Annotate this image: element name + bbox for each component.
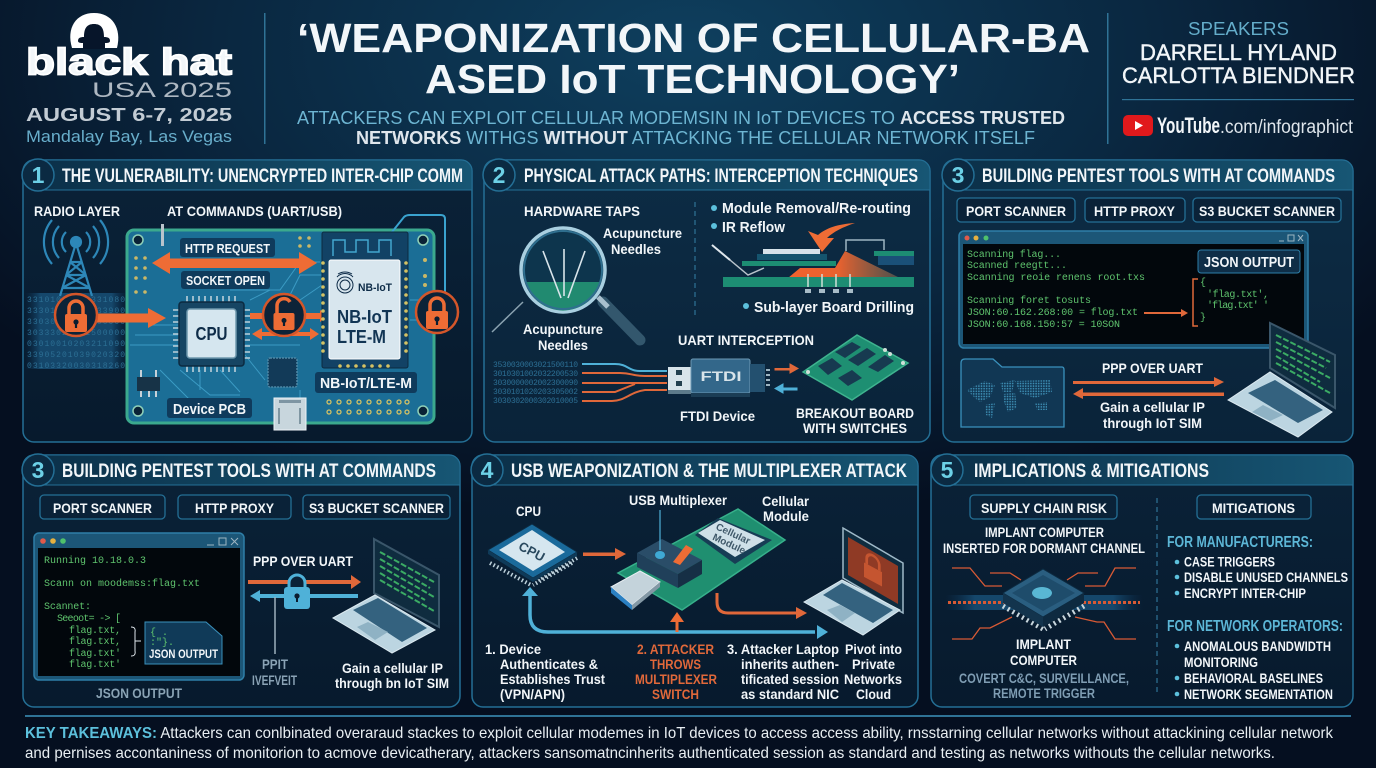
FTDI USB device: FTDI	[700, 368, 742, 384]
binary data stream: 03010010203211090	[27, 340, 125, 349]
bullets: removal and IR reflow: Module Removal/Re-routing	[722, 201, 911, 217]
covert caption: REMOTE TRIGGER	[993, 686, 1095, 701]
footer divider	[25, 715, 1351, 717]
panel 2: physical attack paths	[483, 159, 930, 442]
closed lock at module	[416, 291, 458, 333]
number badge 3	[22, 454, 54, 486]
subtitle: ATTACKERS CAN EXPLOIT CELLULAR MODEMSIN IN IoT DEVICES TO ACCESS TRUSTED	[297, 108, 1065, 128]
NB-IoT module: NB-IoT	[337, 307, 392, 327]
header band	[487, 455, 918, 485]
step 3: tificated session	[741, 672, 839, 687]
step 3	[727, 642, 839, 702]
transistor	[137, 370, 160, 397]
number badge 3: 3	[952, 162, 964, 188]
cellular IP caption: through IoT SIM	[1103, 416, 1202, 431]
socket open tag: SOCKET OPEN	[186, 273, 265, 288]
muted label	[252, 656, 297, 688]
pivot text: Private	[852, 657, 895, 672]
header: Black Hat logo block	[26, 13, 232, 146]
cellular module label: Module	[763, 509, 809, 524]
terminal text: Scanning reoie renens root.txs	[967, 272, 1145, 284]
open lock	[263, 294, 305, 336]
panel 1: the vulnerability	[22, 159, 472, 442]
mux block	[637, 539, 702, 588]
isometric CPU: CPU	[516, 538, 547, 565]
cellular IP caption: Gain a cellular IP	[1100, 400, 1205, 415]
CPU label: CPU	[516, 504, 541, 519]
pivot text: Cloud	[856, 687, 891, 702]
NB-IoT/LTE-M tag: NB-IoT/LTE-M	[320, 375, 412, 392]
step 2: SWITCH	[652, 687, 699, 702]
folder with world map	[961, 359, 1064, 427]
HTTP request tag	[180, 238, 275, 257]
terminal text: Seeoot= -> [	[57, 613, 121, 625]
YouTube badge	[1123, 113, 1354, 138]
binary stream: 3030101020203305002	[493, 388, 578, 397]
number badge 4	[471, 454, 503, 486]
tool pill: HTTP proxy	[178, 495, 291, 519]
event date: AUGUST 6-7, 2025	[26, 105, 232, 125]
panel 3: building pentest tools (bottom)	[22, 454, 460, 707]
acupuncture needles label top: Acupuncture	[603, 226, 682, 241]
main title	[297, 15, 1090, 102]
terminal text: flag.txt,	[69, 636, 121, 648]
PPP over UART label: PPP OVER UART	[1102, 360, 1203, 376]
tool pill: S3 bucket scanner: S3 BUCKET SCANNER	[309, 500, 444, 516]
binary data stream: 33101010101331080	[27, 296, 125, 305]
tool pill: port scanner	[957, 198, 1075, 222]
laptop with locked screen	[804, 528, 903, 635]
attacker switch	[673, 545, 693, 565]
breakout label: WITH SWITCHES	[803, 420, 907, 436]
JSON output tag	[1198, 250, 1300, 273]
binary stream	[493, 361, 578, 406]
JSON output document: JSON OUTPUT	[149, 649, 218, 661]
HTTP request tag: HTTP REQUEST	[185, 241, 270, 256]
acupuncture needles label bottom	[523, 322, 603, 353]
JSON bracket and arrow	[1144, 279, 1198, 326]
step 2: MULTIPLEXER	[635, 672, 717, 687]
panel 4: USB weaponization	[471, 454, 918, 707]
PPP arrows	[1073, 377, 1224, 399]
header divider right	[1107, 13, 1108, 144]
panel 1 heading: THE VULNERABILITY: UNENCRYPTED INTER-CHIP COMM	[62, 166, 463, 187]
step 2: 2. ATTACKER	[637, 642, 714, 657]
PPP arrows	[248, 575, 361, 602]
bullets: removal and IR reflow: IR Reflow	[722, 220, 786, 236]
cellular module chip: Module	[711, 532, 747, 557]
double arrow	[152, 252, 317, 274]
lock over PPP link	[284, 575, 310, 609]
terminal text: Scannet:	[44, 602, 91, 613]
isometric CPU	[488, 524, 577, 585]
step 1	[485, 642, 605, 702]
terminal text: flag.txt'	[69, 659, 121, 671]
step 2: THROWS	[650, 657, 701, 672]
binary stream: 3030302000302010005	[493, 397, 578, 406]
orange switch arrow	[670, 612, 684, 632]
terminal text: Running 10.18.0.3	[44, 555, 146, 567]
NB-IoT module	[321, 232, 408, 368]
blue trust arrow	[522, 587, 828, 639]
needle	[492, 302, 523, 332]
magnifying glass with needles	[521, 228, 640, 340]
binary stream: 3030000002002300090	[493, 379, 578, 388]
signal cable	[392, 215, 445, 295]
key takeaways: and pernises accontaniness of monitorion to acmove devicatherary, attackers sansomatncinherits authenticated session as standard and testing as networks withouts the cellular networks.	[25, 745, 1275, 762]
CPU chip	[173, 296, 250, 372]
small arrows between chips	[250, 310, 328, 340]
step 3: inherits authen-	[741, 657, 839, 672]
mitigations pill: MITIGATIONS	[1212, 500, 1295, 516]
breakout label	[796, 405, 914, 436]
USA 2025: USA 2025	[92, 79, 232, 102]
heading: USB WEAPONIZATION & THE MULTIPLEXER ATTACK	[511, 461, 907, 482]
orange session arrow	[717, 593, 807, 619]
binary data stream: 33030100210100000	[27, 318, 125, 327]
panel 3: building pentest tools (top)	[942, 159, 1353, 442]
device PCB	[127, 230, 434, 423]
dashed divider	[1156, 498, 1158, 695]
USB plug	[611, 571, 660, 610]
implant chip	[1003, 569, 1084, 629]
venue: Mandalay Bay, Las Vegas	[26, 127, 232, 146]
cellular IP caption: Gain a cellular IP	[342, 661, 443, 676]
speakers: CARLOTTA BIENDNER	[1122, 63, 1355, 88]
tool pill: HTTP proxy: HTTP PROXY	[195, 500, 275, 516]
hardware taps label: HARDWARE TAPS	[524, 203, 640, 219]
terminal text: flag.txt'	[69, 648, 121, 660]
implant label	[1010, 636, 1077, 668]
breakout board	[803, 335, 908, 400]
pivot text	[844, 642, 902, 702]
JSON output tag: JSON OUTPUT	[1204, 255, 1294, 271]
binary data stream: 30333021021500000	[27, 329, 125, 338]
panel 2 heading: PHYSICAL ATTACK PATHS: INTERCEPTION TECHNIQUES	[524, 166, 918, 187]
panel 1 header band	[38, 160, 472, 190]
dashed divider	[694, 202, 696, 315]
cellular module chip: Cellular	[714, 522, 752, 547]
subtitle	[297, 108, 1065, 148]
number badge 5: 5	[941, 457, 954, 483]
cellular IP caption	[335, 661, 449, 691]
number badge 1	[22, 159, 54, 191]
implant label: COMPUTER	[1010, 652, 1077, 668]
binary stream: 3010301002032200530	[493, 370, 578, 379]
breakout label: BREAKOUT BOARD	[796, 405, 914, 421]
muted label: PPIT	[262, 656, 288, 672]
YouTube badge: YouTube	[1157, 113, 1220, 138]
acupuncture needles label bottom: Needles	[538, 338, 588, 353]
terminal text	[967, 249, 1145, 331]
arrows to breakout board	[775, 364, 798, 393]
cellular IP caption	[1100, 400, 1205, 431]
terminal text: Scanning foret tosuts	[967, 295, 1091, 307]
radio layer label: RADIO LAYER	[34, 203, 120, 219]
JSON output document	[145, 622, 222, 664]
acupuncture needles label top: Needles	[611, 242, 661, 257]
step 1: Establishes Trust	[500, 672, 605, 687]
number badge 3	[942, 159, 974, 191]
tool pill: HTTP proxy: HTTP PROXY	[1094, 203, 1176, 219]
wires	[582, 364, 667, 401]
step 1: Authenticates &	[500, 657, 598, 672]
speakers: DARRELL HYLAND	[1140, 40, 1337, 65]
YouTube badge: .com/infographict	[1220, 117, 1354, 138]
number badge 2	[483, 159, 515, 191]
PPP over UART label: PPP OVER UART	[253, 553, 353, 569]
icon: black hat logo	[70, 13, 118, 49]
JSON output caption: JSON OUTPUT	[96, 685, 182, 701]
laptop	[333, 539, 439, 653]
main title: ‘WEAPONIZATION OF CELLULAR-BA	[297, 15, 1090, 61]
mux label pointer	[659, 510, 661, 550]
step 1: 1. Device	[485, 642, 541, 657]
circuit traces	[952, 568, 1136, 639]
logo wordmark: black hat	[26, 42, 232, 82]
JSON text: 'flag.txt' '	[1207, 300, 1269, 312]
bullets: removal and IR reflow	[711, 201, 911, 236]
terminal text: Scann on moodemss:flag.txt	[44, 578, 200, 590]
terminal window	[959, 231, 1308, 348]
laptop	[1228, 323, 1335, 437]
bracket	[131, 627, 141, 656]
CPU chip: CPU	[196, 324, 228, 344]
terminal text: Scanning flag...	[967, 249, 1061, 261]
tool pill: S3 bucket scanner: S3 BUCKET SCANNER	[1199, 203, 1335, 219]
JSON text: {	[1200, 277, 1206, 289]
JSON text: }	[1200, 312, 1206, 324]
implant caption: INSERTED FOR DORMANT CHANNEL	[943, 541, 1145, 556]
binary data stream: 33905201039020320	[27, 351, 125, 360]
header band	[946, 455, 1353, 485]
terminal text: JSON:60.162.268:00 = flog.txt	[967, 307, 1138, 319]
implant caption	[943, 525, 1145, 556]
covert caption	[959, 671, 1129, 701]
mitigations pill	[1197, 495, 1311, 519]
terminal text	[44, 555, 200, 671]
JSON text: 'flag.txt',	[1207, 289, 1269, 301]
JSON output document: { .	[150, 627, 168, 639]
icon: radio tower	[44, 220, 108, 296]
step 2	[635, 642, 717, 702]
NB-IoT module: NB-IoT	[358, 282, 392, 294]
for network operators list: NETWORK SEGMENTATION	[1184, 687, 1333, 702]
for network operators list: BEHAVIORAL BASELINES	[1184, 671, 1323, 686]
binary data stream: 03103320030318260	[27, 362, 125, 371]
key takeaways: KEY TAKEAWAYS: Attackers can conlbinated overaraud stackes to exploit cellular modemes in IoT devices to access access ability, rnsstarning cellular networks without attackining cellular network	[25, 725, 1334, 742]
Device PCB tag: Device PCB	[173, 401, 246, 418]
closed lock at tower	[55, 294, 97, 336]
FTDI device label: FTDI Device	[680, 409, 755, 424]
terminal text: Scanned reegtt...	[967, 260, 1067, 272]
red data stripe	[945, 595, 1143, 610]
covert caption: COVERT C&C, SURVEILLANCE,	[959, 671, 1129, 686]
panel 2 header band	[499, 160, 930, 190]
bullet: sub-layer board drilling: Sub-layer Board Drilling	[754, 300, 914, 316]
number badge 2: 2	[493, 162, 505, 188]
JSON output document: :"}.	[150, 637, 174, 649]
terminal window	[34, 533, 244, 680]
for network operators list	[1167, 618, 1343, 702]
subtitle: NETWORKS WITHGS WITHOUT ATTACKING THE CELLULAR NETWORK ITSELF	[356, 128, 1035, 148]
for manufacturers list: FOR MANUFACTURERS:	[1167, 534, 1313, 551]
speakers: SPEAKERS	[1188, 19, 1289, 39]
cellular module chip	[695, 518, 772, 564]
tool pill: port scanner: PORT SCANNER	[966, 203, 1066, 219]
UART interception label: UART INTERCEPTION	[678, 332, 814, 348]
panel 3 header band	[958, 160, 1353, 190]
step 3: as standard NIC	[741, 687, 839, 702]
pointer line	[274, 597, 276, 654]
cellular module label	[762, 494, 810, 524]
implant caption: IMPLANT COMPUTER	[985, 525, 1104, 540]
tool pill: S3 bucket scanner	[1193, 198, 1341, 222]
AT commands label: AT COMMANDS (UART/USB)	[167, 203, 342, 219]
for manufacturers list	[1167, 534, 1348, 601]
cellular IP caption: through bn IoT SIM	[335, 676, 449, 691]
number badge 5	[931, 454, 963, 486]
terminal text: JSON:60.168.150:57 = 10SON	[967, 320, 1120, 331]
number badge 3: 3	[32, 457, 44, 483]
acupuncture needles label bottom: Acupuncture	[523, 322, 603, 337]
binary stream: 3530030003021500110	[493, 361, 578, 370]
for manufacturers list: CASE TRIGGERS	[1184, 554, 1275, 570]
for network operators list: MONITORING	[1184, 655, 1258, 670]
muted label: IVEFVEIT	[252, 672, 297, 688]
tool pill: HTTP proxy	[1085, 198, 1185, 222]
arrow CPU to mux	[583, 548, 626, 560]
binary data stream: 33301000000033900	[27, 307, 125, 316]
pivot text: Pivot into	[845, 642, 902, 657]
pad rows	[327, 400, 409, 414]
implant label: IMPLANT	[1016, 636, 1071, 652]
IR reflow board diagram	[712, 223, 914, 293]
green carrier board	[618, 509, 785, 610]
speakers	[1122, 19, 1355, 100]
heading: IMPLICATIONS & MITIGATIONS	[974, 461, 1209, 482]
cellular module label: Cellular	[762, 494, 810, 509]
tool pill: S3 bucket scanner	[303, 495, 450, 519]
key takeaways	[25, 725, 1334, 762]
panel 5: implications and mitigations	[931, 454, 1353, 707]
terminal text: flag.txt,	[69, 625, 121, 637]
number badge 4: 4	[481, 457, 494, 483]
FTDI USB device	[668, 359, 770, 397]
JSON text	[1200, 277, 1269, 324]
for network operators list: ANOMALOUS BANDWIDTH	[1184, 639, 1331, 654]
for manufacturers list: ENCRYPT INTER-CHIP	[1184, 586, 1306, 601]
binary data stream	[25, 293, 127, 371]
arrow from tower to CPU	[96, 308, 166, 328]
main title: ASED IoT TECHNOLOGY’	[425, 56, 960, 102]
acupuncture needles label top	[603, 226, 682, 257]
tool pill: port scanner	[40, 495, 165, 519]
number badge 1: 1	[32, 162, 45, 188]
small chip	[268, 358, 297, 387]
pivot text: Networks	[844, 672, 902, 687]
supply chain risk pill: SUPPLY CHAIN RISK	[981, 500, 1107, 516]
step 3: 3. Attacker Laptop	[727, 642, 839, 657]
NB-IoT module: LTE-M	[337, 327, 386, 347]
header divider left	[264, 13, 266, 144]
step 1: (VPN/APN)	[500, 687, 565, 702]
header band	[38, 455, 460, 485]
supply chain risk pill	[970, 495, 1117, 519]
USB multiplexer label: USB Multiplexer	[629, 493, 728, 508]
tool pill: port scanner: PORT SCANNER	[53, 500, 152, 516]
USB port	[274, 398, 306, 430]
probe pin	[161, 224, 164, 246]
heading: BUILDING PENTEST TOOLS WITH AT COMMANDS	[62, 461, 436, 482]
